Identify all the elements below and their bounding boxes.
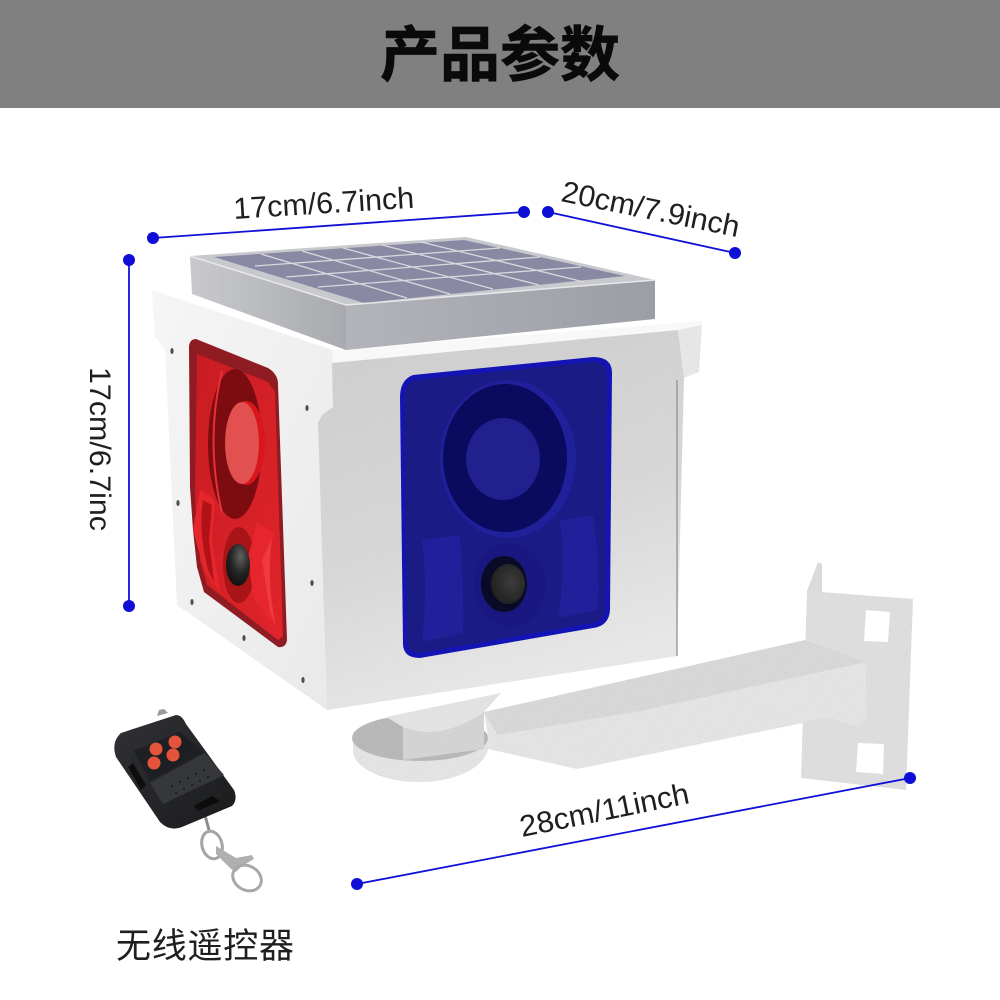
red reflector left (193, 490, 220, 592)
blue reflector right (558, 515, 598, 618)
red horn cavity (208, 369, 262, 519)
dimension: height 17cm (83, 254, 135, 612)
enclosure right face (318, 329, 684, 710)
grille dots (171, 769, 209, 794)
cell grid lines (255, 242, 584, 298)
blue reflector left (422, 535, 463, 642)
blue lens inner (404, 362, 607, 653)
arm top face (484, 640, 866, 735)
dimension: bracket 28cm: 28cm/11inch (517, 778, 692, 844)
support cone (386, 693, 501, 735)
wall plate flange (807, 562, 822, 600)
red reflector right (248, 523, 277, 630)
red horn lip (214, 371, 222, 513)
solar panel (190, 237, 655, 350)
button A (150, 742, 162, 756)
red horn driver (225, 402, 259, 484)
title: 产品参数 (380, 22, 620, 89)
mounting disc (353, 738, 488, 782)
blue horn driver (466, 418, 540, 500)
dimension: width 17cm (147, 182, 530, 244)
panel front side (346, 280, 655, 350)
arm side face (484, 662, 866, 769)
remote body (114, 715, 236, 829)
blue siren panel (400, 357, 612, 658)
remote caption: 无线遥控器 (116, 927, 294, 966)
key ring (199, 829, 225, 861)
mounting screw holes (170, 348, 314, 683)
enclosure right edge shadow (676, 380, 678, 656)
panel frame (190, 237, 655, 305)
red lens inner (195, 354, 283, 640)
button C (148, 756, 160, 770)
blue horn flange (440, 380, 576, 538)
enclosure left face (152, 290, 333, 710)
alarm product illustration (152, 237, 913, 790)
red reflector left shade (201, 500, 214, 582)
photovoltaic cells (214, 240, 625, 303)
antenna stub (157, 709, 168, 716)
mounting disc top (352, 715, 488, 761)
red siren panel (189, 339, 287, 647)
dimension: bracket 28cm (351, 772, 916, 890)
enclosure lid band (332, 321, 702, 363)
red PIR housing (223, 527, 255, 603)
red reflector right shade (262, 538, 276, 626)
remote side slot (128, 763, 146, 790)
header banner (0, 0, 1000, 108)
button D (166, 748, 180, 762)
panel front highlight (190, 256, 655, 305)
blue PIR housing (474, 543, 546, 627)
key chain link (203, 808, 209, 830)
snap hook loop (228, 860, 266, 896)
blue horn cavity (443, 384, 567, 532)
support column (403, 712, 484, 760)
red PIR lens (226, 544, 250, 586)
remote upper panel (134, 732, 203, 781)
blue PIR lens (491, 564, 525, 604)
enclosure right flange (678, 325, 702, 378)
remote lower grille (150, 753, 224, 804)
key slot (194, 796, 220, 811)
red horn driver base (227, 401, 265, 485)
panel left side (190, 256, 346, 350)
button B (168, 736, 182, 748)
blue lens body (400, 357, 612, 658)
wall plate (801, 591, 913, 790)
wall bracket (352, 562, 913, 790)
dimension: width 17cm: 17cm/6.7inch (232, 182, 415, 226)
snap hook body (216, 846, 254, 872)
red lens rim (189, 339, 287, 647)
wireless remote control (114, 709, 266, 896)
blue PIR ring (481, 556, 527, 612)
dimension: depth 20cm: 20cm/7.9inch (559, 176, 743, 244)
dimension: height 17cm: 17cm/6.7inc (83, 367, 116, 531)
